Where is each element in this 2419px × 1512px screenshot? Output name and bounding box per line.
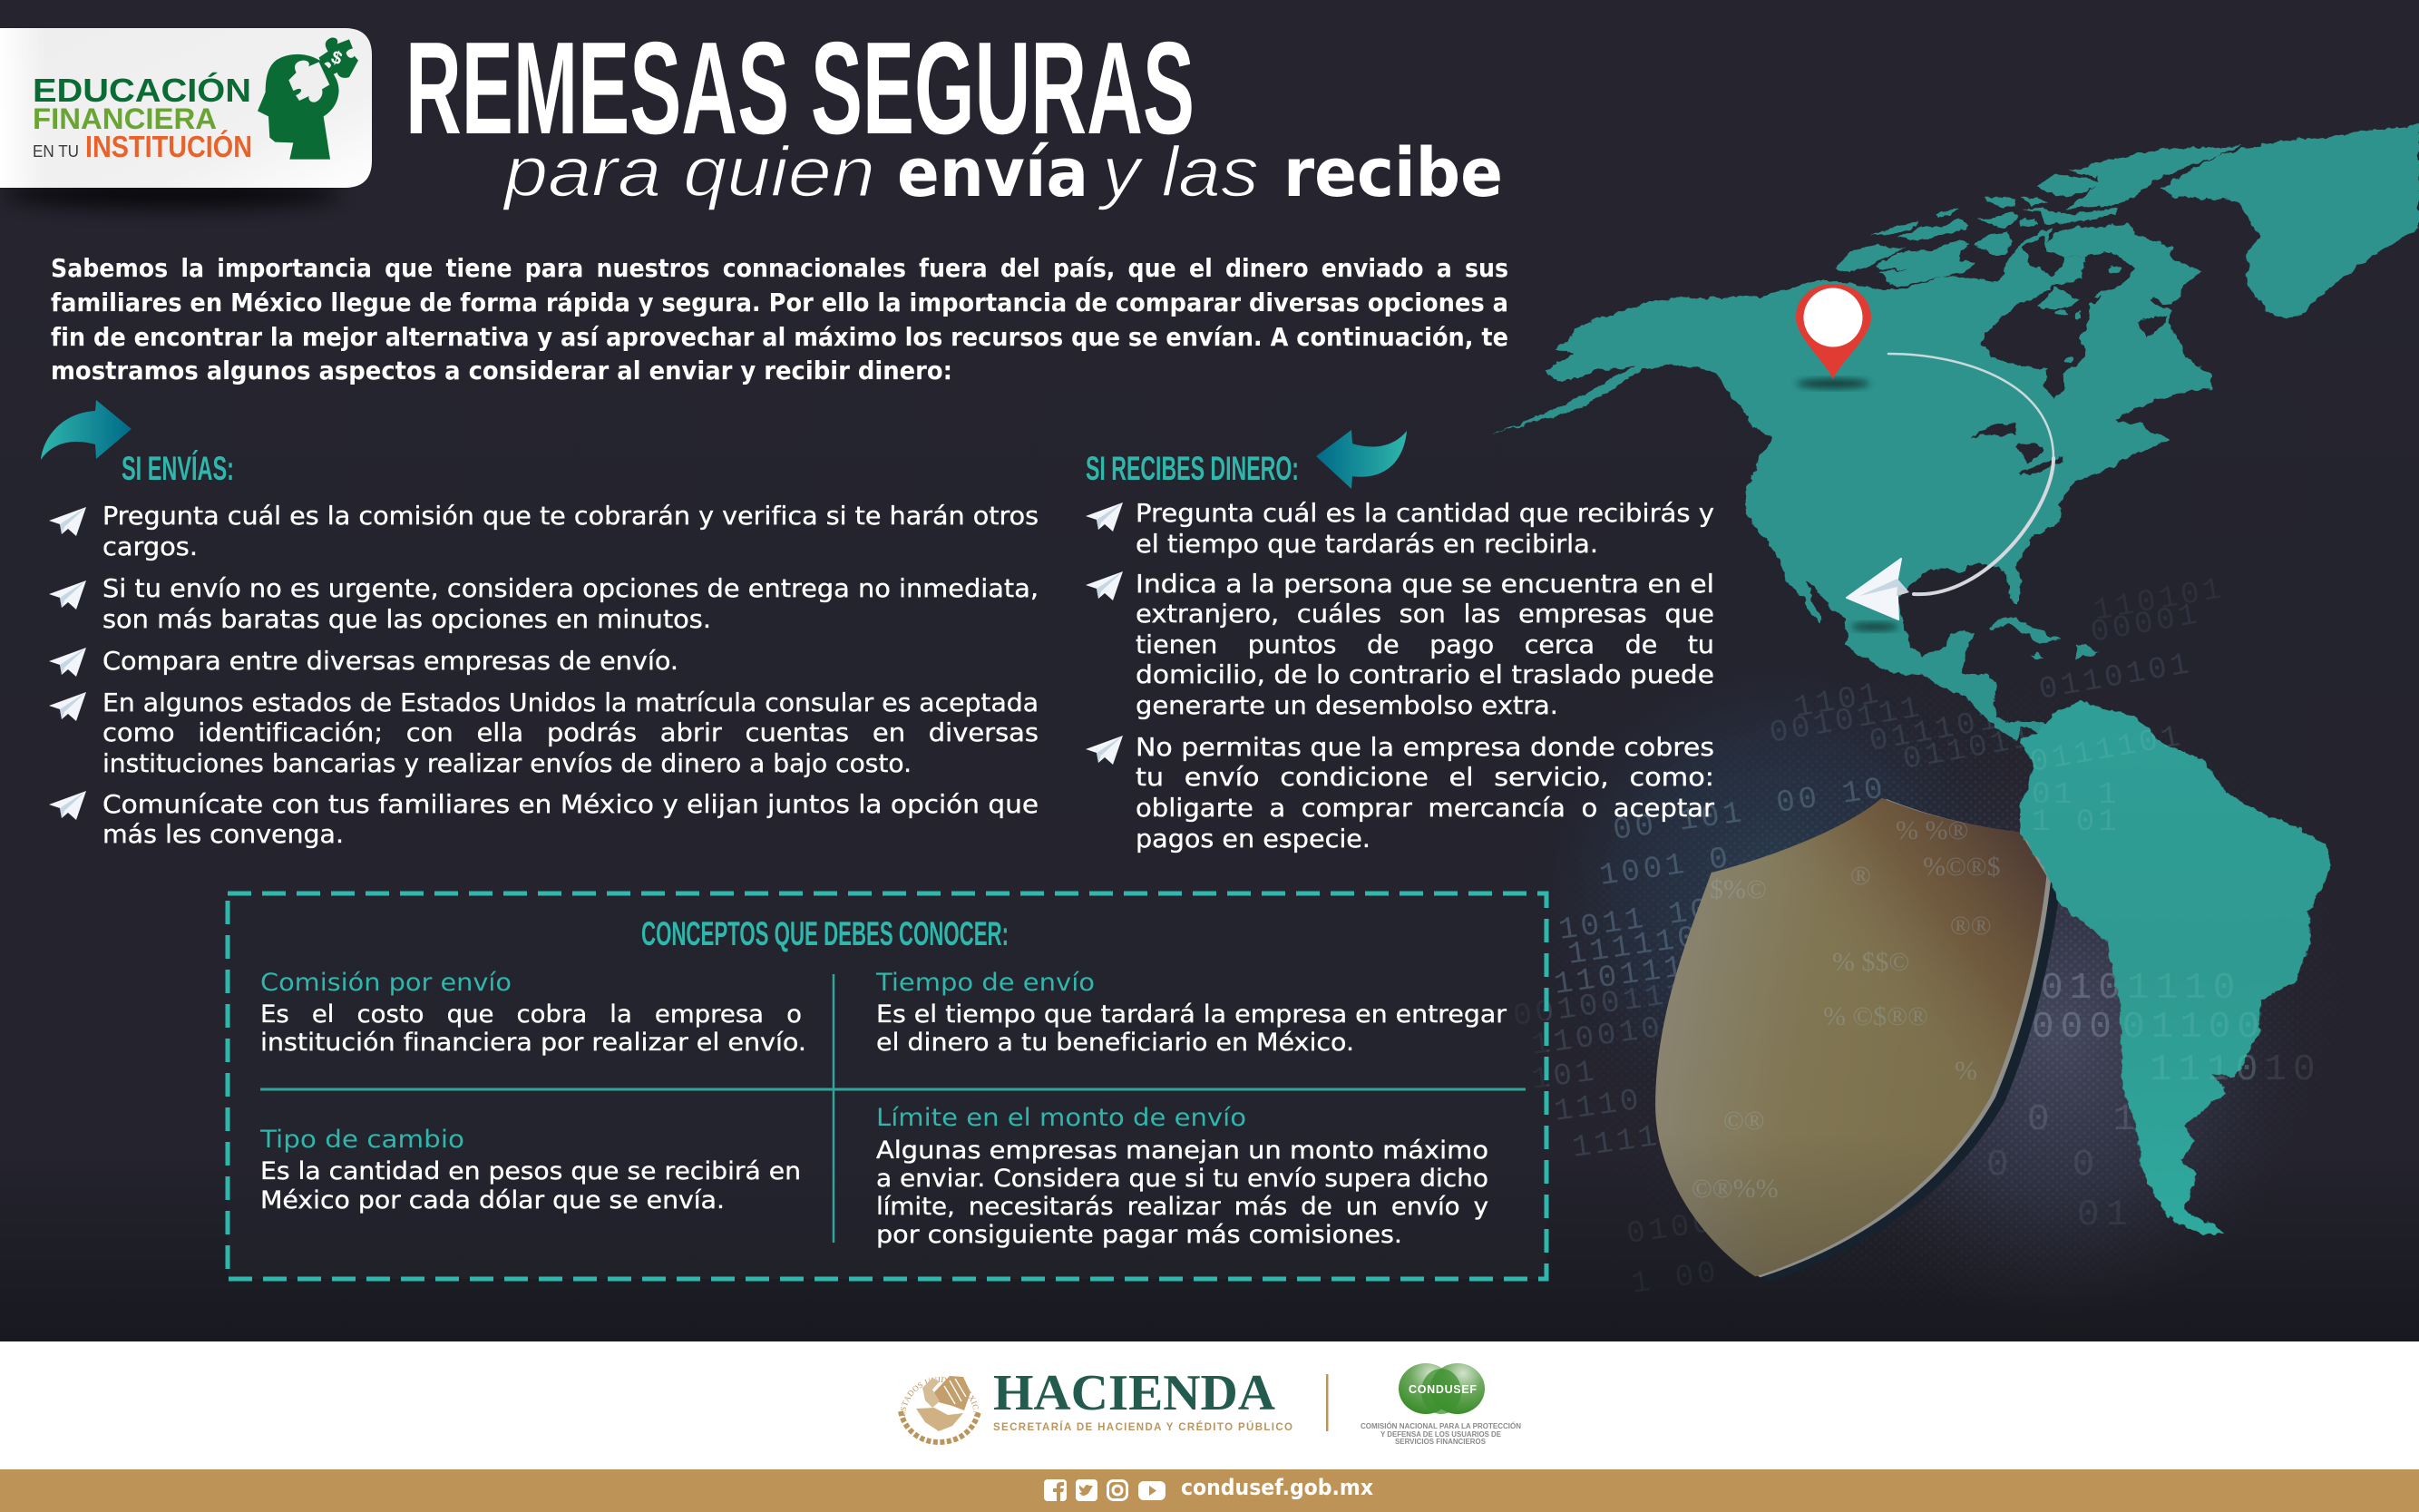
binary code texture: 1100100 (1529, 1008, 1688, 1064)
shield symbols: $%© (1710, 874, 1767, 904)
binary code over South America: 01 1 (2032, 778, 2121, 813)
map (1491, 125, 2419, 1236)
icon: instagram (1108, 1480, 1127, 1500)
binary code texture: 011101 (1867, 703, 2004, 760)
receive tips text: Pregunta cuál es la cantidad que recibirás y (1136, 498, 1714, 528)
icon: facebook (1044, 1479, 1067, 1501)
binary code texture: 011011 (1900, 721, 2037, 778)
send tips text: En algunos estados de Estados Unidos la matrícula consular es aceptada (102, 688, 1039, 717)
send tips text: Si tu envío no es urgente, considera opciones de entrega no inmediata, (102, 573, 1039, 603)
send tips text: cargos. (102, 532, 198, 561)
icon: twitter (1076, 1479, 1097, 1501)
logo: Condusef: CONDUSEF (1409, 1383, 1477, 1396)
logo: Hacienda seal: ESTADOS UNIDOS MEXICANOS (901, 1377, 980, 1417)
binary code texture: 00001 (2088, 598, 2203, 651)
concept: tiempo de envío: Es el tiempo que tardará la empresa en entregar (876, 1000, 1507, 1029)
binary code texture: 11111001 (1566, 914, 1746, 973)
concept: límite en el monto de envío: Algunas empresas manejan un monto máximo (876, 1136, 1488, 1165)
send tips text: Comunícate con tus familiares en México y elijan juntos la opción que (102, 789, 1039, 819)
binary code texture: 00100111 (1511, 976, 1692, 1035)
concept: tiempo de envío: Tiempo de envío (875, 969, 1095, 997)
icon: paper plane bullet (1086, 736, 1123, 765)
binary code texture: 00 10 (1774, 772, 1888, 822)
logo: Hacienda wordmark: SECRETARÍA DE HACIENDA Y CRÉDITO PÚBLICO (993, 1421, 1292, 1433)
binary code over South America: 01100 (2122, 1007, 2266, 1049)
concept: tipo de cambio (259, 1126, 801, 1214)
logo: Condusef: Y DEFENSA DE LOS USUARIOS DE (1380, 1429, 1501, 1439)
receive tips text: domicilio, de lo contrario el traslado puede (1136, 659, 1714, 689)
paper plane on map (1847, 559, 1909, 630)
shield symbols: % (1955, 1056, 1977, 1086)
list: si envías (49, 501, 1039, 849)
concept: tiempo de envío (875, 969, 1507, 1057)
curved flight path (1888, 354, 2053, 594)
concept: tipo de cambio: Es la cantidad en pesos que se recibirá en (260, 1157, 801, 1185)
logo: Hacienda seal (898, 1376, 981, 1445)
receive tips text (1136, 498, 1715, 854)
receive tips text: Indica a la persona que se encuentra en el (1136, 569, 1714, 599)
receive tips text: obligarte a comprar mercancía o aceptar (1136, 793, 1715, 823)
title: REMESAS SEGURAS (405, 15, 1195, 161)
shield symbols: ®® (1950, 911, 1992, 941)
concept: límite en el monto de envío: Límite en el monto de envío (876, 1104, 1246, 1132)
receive tips text: tienen puntos de pago cerca de tu (1136, 629, 1714, 659)
send tips text: más les convenga. (102, 819, 344, 849)
shield symbols: % ©$®® (1823, 1001, 1928, 1031)
concept: límite en el monto de envío: a enviar. Considera que si tu envío supera dicho (876, 1165, 1488, 1193)
receive tips text: extranjero, cuáles son las empresas que (1136, 599, 1714, 629)
receive tips text: el tiempo que tardarás en recibirla. (1136, 529, 1598, 559)
concept: límite en el monto de envío: límite, necesitarás realizar más de un envío y (876, 1193, 1488, 1221)
map: Greenland (2161, 125, 2419, 321)
binary code over South America: 1110 (2127, 968, 2241, 1010)
receive tips text: tu envío condicione el servicio, como: (1136, 762, 1714, 792)
binary code texture: 1001 0 (1597, 842, 1734, 894)
intro paragraph: mostramos algunos aspectos a considerar al enviar y recibir dinero: (51, 356, 952, 385)
icon: head with puzzle: $ (328, 47, 345, 69)
heading: si envías: SI ENVÍAS: (122, 450, 234, 487)
concept: tipo de cambio: Tipo de cambio (259, 1126, 464, 1154)
concept: comisión por envío: Es el costo que cobra la empresa o (260, 1000, 802, 1029)
arrow: receive (1316, 430, 1407, 489)
logo: Condusef: COMISIÓN NACIONAL PARA LA PROTECCIÓN (1361, 1420, 1521, 1430)
panel: conceptos (228, 893, 1546, 1279)
send tips text: como identificación; con ella podrás abrir cuentas en diversas (102, 717, 1039, 747)
logo: Condusef: SERVICIOS FINANCIEROS (1395, 1437, 1486, 1446)
receive tips text: generarte un desembolso extra. (1136, 690, 1558, 720)
map: Canadian arctic (1835, 146, 2240, 306)
binary code texture: 0 0 0 (1986, 1145, 2187, 1186)
binary code texture: 00011100 (2032, 1007, 2261, 1049)
icon: paper plane bullet (49, 648, 86, 677)
binary code texture: 1101111 (1552, 947, 1711, 1003)
concept: tiempo de envío: el dinero a tu beneficiario en México. (876, 1029, 1354, 1057)
binary code over South America: 0111101 (2027, 720, 2186, 781)
shield symbols: % %® (1896, 815, 1968, 845)
send tips text: Pregunta cuál es la comisión que te cobrarán y verifica si te harán otros (102, 501, 1039, 531)
shield symbols: % $$© (1832, 947, 1909, 977)
intro paragraph (51, 253, 1508, 385)
binary code texture: 111100 (1570, 1114, 1707, 1166)
concept: límite en el monto de envío: por consiguiente pagar más comisiones. (876, 1221, 1402, 1249)
intro paragraph: familiares en México llegue de forma rápida y segura. Por ello la importancia de comparar diversas opciones a (51, 288, 1508, 317)
icon: youtube (1138, 1481, 1166, 1500)
icon: paper plane bullet (49, 791, 86, 820)
concept: tipo de cambio: México por cada dólar que se envía. (260, 1186, 725, 1214)
icon: paper plane bullet (49, 692, 86, 721)
binary code texture: 0 1 (2027, 1099, 2141, 1141)
footer: tan band (0, 1469, 2419, 1512)
receive tips text: pagos en especie. (1136, 824, 1370, 854)
binary code texture: 01001 (1624, 1203, 1739, 1253)
location pin (1796, 284, 1871, 388)
binary code texture: 1101 (1791, 677, 1885, 727)
logo card: Educación Financiera en tu Institución: EDUCACIÓN (33, 71, 251, 109)
binary code texture: 1110 (1552, 1084, 1644, 1130)
shield symbols: %©®$ (1923, 852, 2001, 882)
send tips text: instituciones bancarias y realizar envíos de dinero a bajo costo. (102, 748, 912, 778)
send tips text (102, 501, 1039, 849)
binary code texture: 110010 (2150, 1049, 2322, 1091)
icon: paper plane bullet (49, 507, 86, 536)
binary code over South America (2027, 720, 2266, 1091)
icon: paper plane bullet (49, 580, 86, 610)
subtitle: para quien (502, 132, 875, 211)
concept: comisión por envío: institución financiera por realizar el envío. (260, 1029, 806, 1057)
binary code texture: 101 (1529, 1055, 1600, 1098)
binary code over South America: 1 01 (2032, 805, 2121, 840)
map: North America (1491, 146, 2240, 741)
subtitle: envía (897, 134, 1088, 212)
send tips text: son más baratas que las opciones en minutos. (102, 604, 711, 634)
send tips text: Compara entre diversas empresas de envío. (102, 646, 678, 676)
receive tips text: No permitas que la empresa donde cobres (1136, 732, 1714, 762)
map: South America (2020, 701, 2331, 1236)
logo card: Educación Financiera en tu Institución: EN TU (33, 142, 79, 161)
concept: comisión por envío (260, 969, 806, 1057)
shield symbols (1692, 815, 2001, 1204)
binary code texture: 0110101 (2036, 648, 2195, 708)
shield (1655, 798, 2061, 1282)
binary code texture: 0010111 (1767, 691, 1926, 752)
list: si recibes dinero (1086, 498, 1715, 854)
subtitle: y las (1097, 132, 1259, 211)
binary code over South America: 1110 (2150, 1049, 2264, 1091)
concept: comisión por envío: Comisión por envío (260, 969, 512, 997)
footer: white logo band (0, 1341, 2419, 1469)
logo: Hacienda wordmark: HACIENDA (993, 1365, 1276, 1421)
logo: Condusef (1361, 1363, 1521, 1446)
website: condusef.gob.mx (1181, 1475, 1373, 1500)
binary code texture: 0101110 (2041, 968, 2241, 1010)
binary code texture: 110101 (2091, 572, 2228, 629)
binary code texture: 01 (2077, 1195, 2134, 1236)
map: Caribbean islands (1988, 619, 2098, 660)
binary code texture (1511, 572, 2322, 1302)
logo card: Educación Financiera en tu Institución: FINANCIERA (33, 102, 217, 135)
map: Hudson Bay and inland waters (1884, 238, 2210, 473)
binary code texture: 1011 100 (1556, 890, 1737, 949)
icon: paper plane bullet (1086, 502, 1123, 532)
shield symbols: ©®%% (1692, 1174, 1779, 1204)
heading: si recibes dinero: SI RECIBES DINERO: (1086, 450, 1299, 487)
binary code texture: 1 00 (1629, 1256, 1722, 1302)
icon: paper plane bullet (1086, 571, 1123, 600)
logo card: Educación Financiera en tu Institución (0, 28, 372, 209)
subtitle: recibe (1283, 134, 1503, 212)
digital data glow (1580, 707, 2280, 1273)
heading: conceptos: CONCEPTOS QUE DEBES CONOCER: (641, 915, 1009, 952)
shield symbols: ® (1850, 861, 1871, 891)
intro paragraph: fin de encontrar la mejor alternativa y así aprovechar al máximo los recursos que se envían. A continuación, te (51, 322, 1508, 352)
icon: head with puzzle (258, 38, 358, 160)
concept: límite en el monto de envío (876, 1104, 1488, 1249)
intro paragraph: Sabemos la importancia que tiene para nuestros connacionales fuera del país, que el dinero enviado a sus (51, 253, 1508, 283)
logo card: Educación Financiera en tu Institución: INSTITUCIÓN (85, 130, 252, 163)
arrow: send (41, 400, 132, 460)
binary code texture: 00 101 (1611, 796, 1748, 849)
shield symbols: ©® (1723, 1106, 1765, 1136)
subtitle (502, 132, 1503, 212)
